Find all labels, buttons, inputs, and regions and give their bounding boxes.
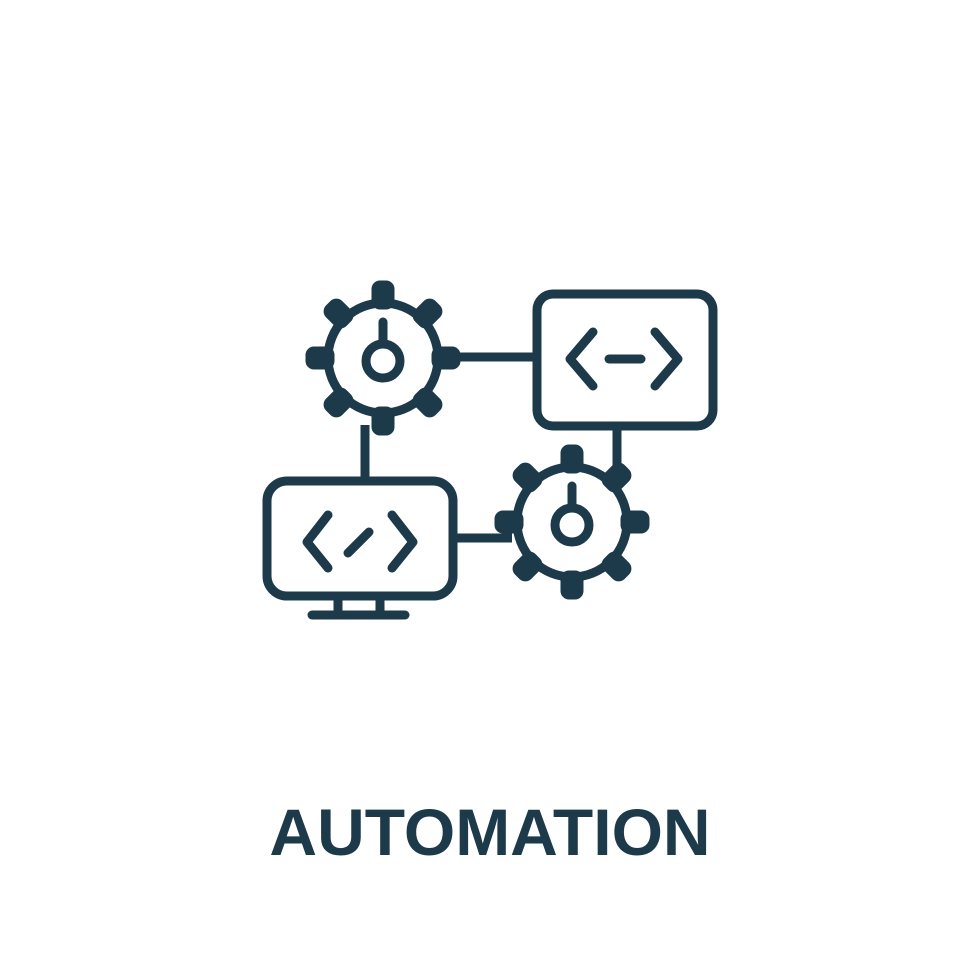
icon: monitor bottom left [267, 481, 453, 615]
connectors [365, 357, 617, 538]
icon: gear bottom [499, 449, 645, 595]
title: AUTOMATION [269, 795, 711, 869]
icon: code window top right [537, 294, 713, 426]
icon: gear top [310, 285, 456, 431]
